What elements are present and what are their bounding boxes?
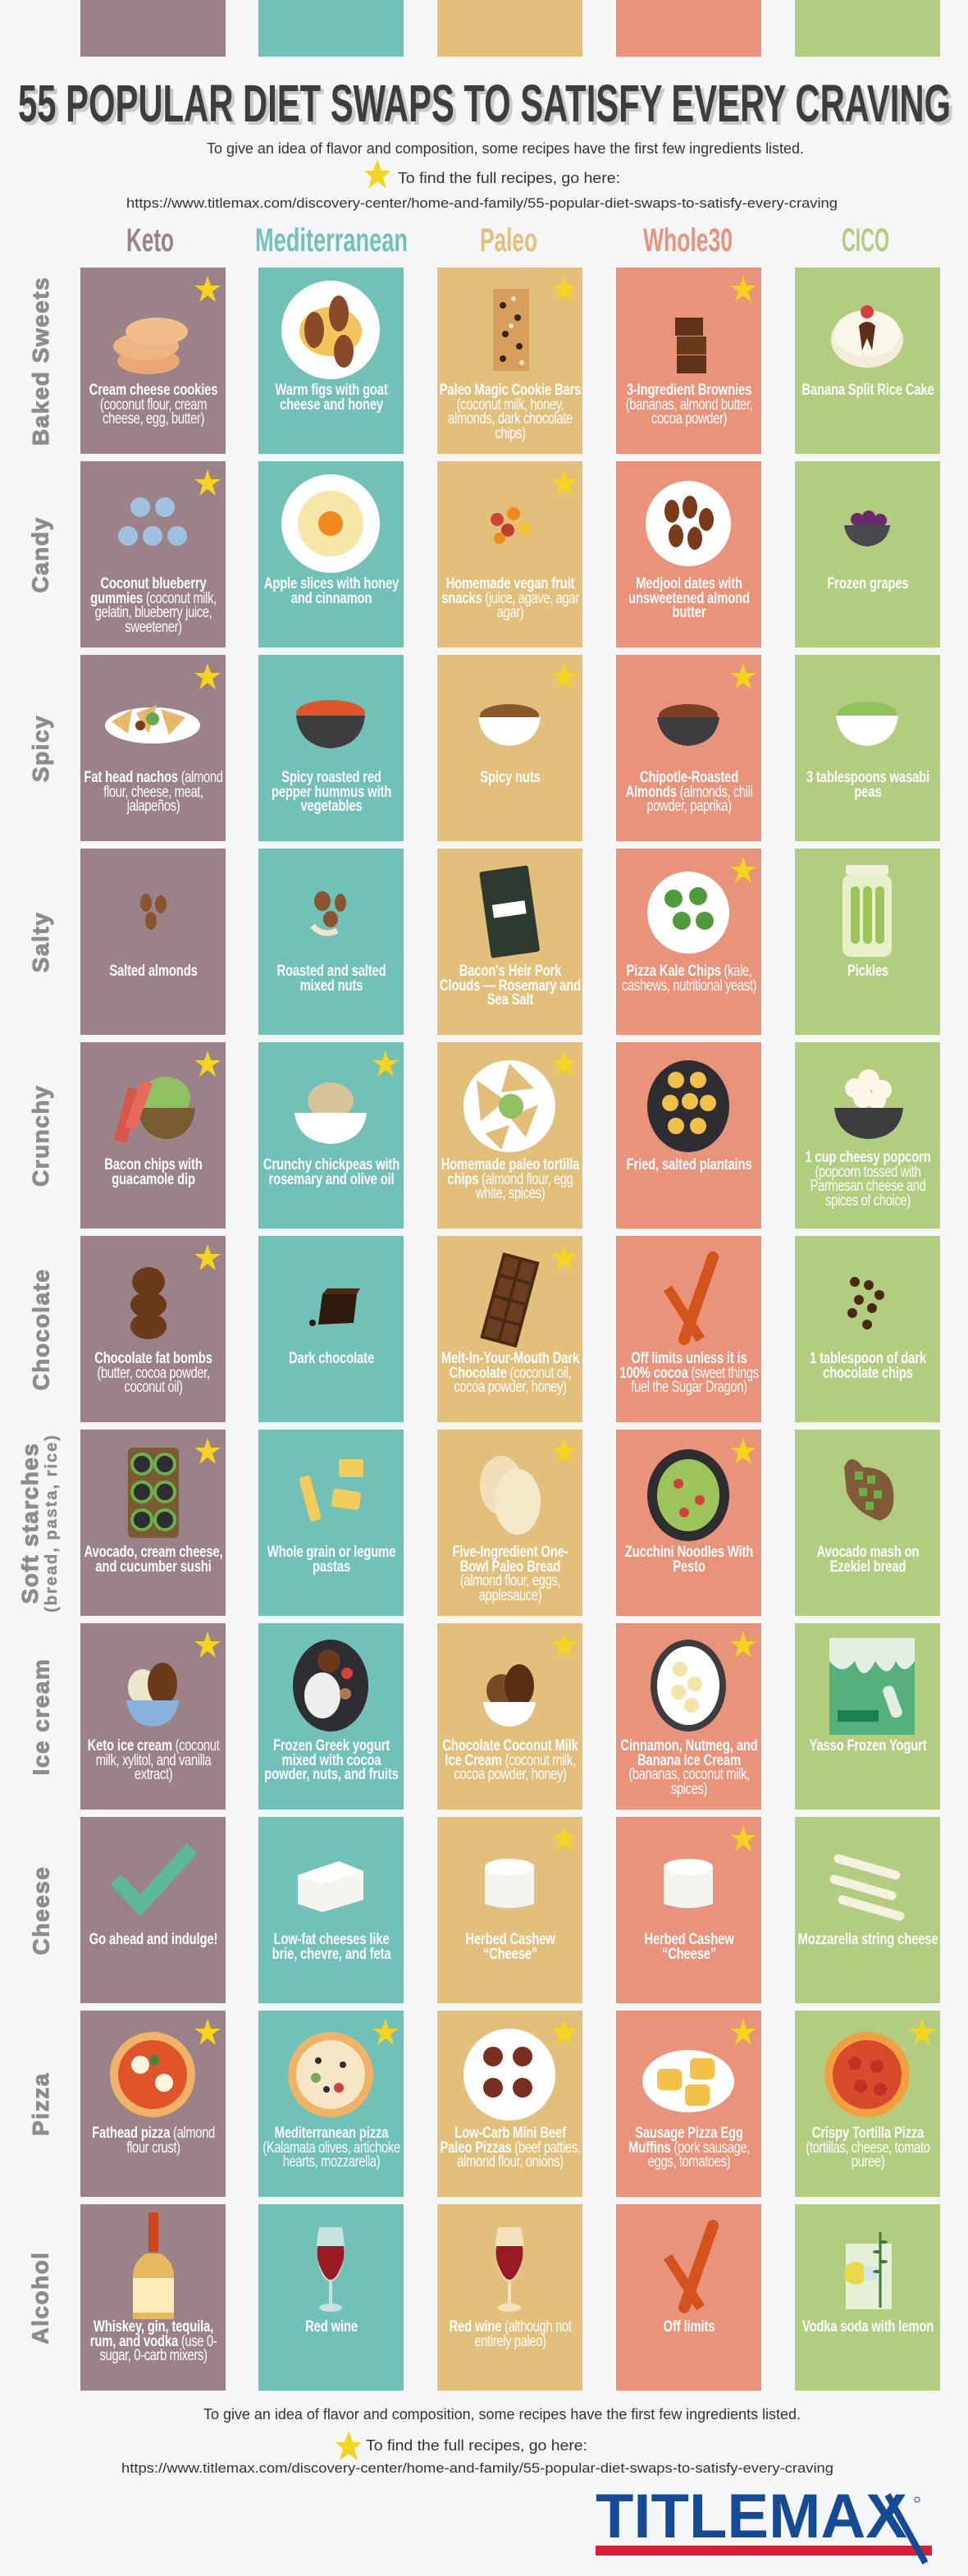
row label: Alcohol: Alcohol <box>28 2251 53 2344</box>
card: cico string cheese <box>795 1817 940 2003</box>
card: keto gummies <box>80 461 226 647</box>
card: paleo fruit snacks: Homemade vegan fruit snacks (juice, agave, agar agar) <box>441 575 578 621</box>
card: whole30 banana ice cream <box>616 1623 761 1810</box>
card: paleo coconut ice cream <box>437 1623 582 1810</box>
card: cico yasso: Yasso Frozen Yogurt <box>809 1737 926 1755</box>
card: paleo cashew cheese <box>437 1817 582 2003</box>
column headers: Whole30 <box>643 222 733 259</box>
card: paleo spicy nuts: Spicy nuts <box>480 769 540 786</box>
card: keto cream cheese cookies <box>80 268 226 454</box>
card: med red wine: Red wine <box>305 2318 357 2336</box>
card: med apple slices: Apple slices with honey and cinnamon <box>263 575 399 607</box>
card: med dark chocolate: Dark chocolate <box>288 1350 374 1367</box>
card: cico rice cake <box>795 268 940 454</box>
top color bars <box>80 0 940 57</box>
card: med mixed nuts <box>258 849 404 1035</box>
card: whole30 X: Off limits unless it is 100% cocoa (sweet things fuel the Sugar Dragon) <box>619 1350 758 1396</box>
card: paleo red wine: Red wine (although not entirely paleo) <box>449 2318 571 2350</box>
card: keto cream cheese cookies: Cream cheese cookies (coconut flour, cream cheese, egg, butter) <box>89 382 217 428</box>
card: cico avocado toast: Avocado mash on Ezekiel bread <box>816 1544 919 1576</box>
card: cico tortilla pizza: Crispy Tortilla Pizza (tortillas, cheese, tomato puree) <box>806 2125 929 2171</box>
card: keto checkmark <box>80 1817 226 2003</box>
card: med mixed nuts: Roasted and salted mixed nuts <box>276 963 386 995</box>
subtitle: To give an idea of flavor and composition, some recipes have the first few ingredients listed. <box>207 140 804 157</box>
card: cico vodka soda: Vodka soda with lemon <box>801 2318 934 2336</box>
card: med frozen yogurt: Frozen Greek yogurt mixed with cocoa powder, nuts, and fruits <box>264 1737 398 1783</box>
card: keto nachos: Fat head nachos (almond flour, cheese, meat, jalapeños) <box>84 769 222 815</box>
row label: Cheese: Cheese <box>28 1865 53 1955</box>
card: keto checkmark: Go ahead and indulge! <box>89 1931 217 1948</box>
card: cico pickles <box>795 849 940 1035</box>
card: med low fat cheese <box>258 1817 404 2003</box>
card: paleo chocolate bar <box>437 1236 582 1422</box>
column headers: CICO <box>842 222 889 259</box>
card: cico tortilla pizza <box>795 2011 940 2197</box>
subtitle <box>126 140 838 211</box>
row label: Salty: Salty <box>28 911 53 972</box>
row label: Ice cream: Ice cream <box>28 1658 53 1775</box>
card: med pastas: Whole grain or legume pastas <box>267 1544 395 1576</box>
card: paleo cashew cheese: Herbed Cashew “Cheese” <box>465 1931 555 1963</box>
column headers: Keto <box>126 222 174 259</box>
card: cico popcorn: 1 cup cheesy popcorn (popcorn tossed with Parmesan cheese and spices of choice) <box>805 1149 930 1210</box>
card: whole30 brownies <box>616 268 761 454</box>
card: med red wine <box>258 2204 404 2391</box>
footer notes: To find the full recipes, go here: <box>366 2437 587 2454</box>
column headers: Mediterranean <box>255 222 408 259</box>
row label: Soft starches <box>17 1434 61 1612</box>
card: whole30 kale chips <box>616 849 761 1035</box>
subtitle: To find the full recipes, go here: <box>398 170 620 186</box>
card: cico vodka soda <box>795 2204 940 2391</box>
card: med hummus: Spicy roasted red pepper hummus with vegetables <box>271 769 391 815</box>
card: keto almonds: Salted almonds <box>109 963 197 980</box>
row label: Spicy: Spicy <box>28 714 53 782</box>
card: med low fat cheese: Low-fat cheeses like brie, chevre, and feta <box>272 1931 390 1963</box>
row label: Baked Sweets: Baked Sweets <box>28 276 53 446</box>
card: whole30 dates <box>616 461 761 647</box>
card: whole30 X <box>616 1236 761 1422</box>
card: cico popcorn <box>795 1042 940 1229</box>
card: keto ice cream <box>80 1623 226 1810</box>
card: whole30 zucchini <box>616 1430 761 1616</box>
card: whole30 plantains <box>616 1042 761 1229</box>
card: keto liquor bottle <box>80 2204 226 2391</box>
card: whole30 zucchini: Zucchini Noodles With Pesto <box>624 1544 753 1576</box>
card: paleo mini pizzas: Low-Carb Mini Beef Paleo Pizzas (beef patties, almond flour, onions) <box>440 2125 580 2171</box>
card: paleo pork clouds <box>437 849 582 1035</box>
card: whole30 almonds <box>616 655 761 841</box>
card: med pizza <box>258 2011 404 2197</box>
card: med chickpeas: Crunchy chickpeas with rosemary and olive oil <box>263 1156 400 1188</box>
card: paleo fruit snacks <box>437 461 582 647</box>
card: whole30 almonds: Chipotle-Roasted Almonds (almonds, chili powder, paprika) <box>625 769 752 815</box>
card: med dark chocolate <box>258 1236 404 1422</box>
card: whole30 egg muffins <box>616 2011 761 2197</box>
card: cico rice cake: Banana Split Rice Cake <box>801 382 934 399</box>
card: med pastas <box>258 1430 404 1616</box>
card: paleo mini pizzas <box>437 2011 582 2197</box>
card: med hummus <box>258 655 404 841</box>
card: whole30 off limits X: Off limits <box>663 2318 715 2336</box>
row label: Crunchy: Crunchy <box>28 1084 53 1187</box>
card: cico yasso <box>795 1623 940 1810</box>
card: whole30 off limits X <box>616 2204 761 2391</box>
card: whole30 cashew cheese <box>616 1817 761 2003</box>
card: med figs: Warm figs with goat cheese and honey <box>275 382 387 414</box>
card: cico grapes <box>795 461 940 647</box>
row label: Pizza: Pizza <box>28 2072 53 2135</box>
column headers: Paleo <box>480 222 537 259</box>
card: cico pickles: Pickles <box>847 963 888 980</box>
card: paleo bread <box>437 1430 582 1616</box>
card: med pizza: Mediterranean pizza (Kalamata olives, artichoke hearts, mozzarella) <box>263 2125 400 2171</box>
card: whole30 brownies: 3-Ingredient Brownies (bananas, almond butter, cocoa powder) <box>625 382 752 428</box>
card: cico wasabi peas <box>795 655 940 841</box>
card: whole30 kale chips: Pizza Kale Chips (kale, cashews, nutritional yeast) <box>621 963 756 995</box>
card: cico avocado toast <box>795 1430 940 1616</box>
card: med apple slices <box>258 461 404 647</box>
card: whole30 egg muffins: Sausage Pizza Egg Muffins (pork sausage, eggs, tomatoes) <box>628 2125 749 2171</box>
card: keto fat bombs: Chocolate fat bombs (butter, cocoa powder, coconut oil) <box>94 1350 212 1396</box>
card: cico wasabi peas: 3 tablespoons wasabi peas <box>806 769 929 801</box>
column headers <box>126 222 889 259</box>
card: cico grapes: Frozen grapes <box>827 575 908 593</box>
footer notes: https://www.titlemax.com/discovery-center/home-and-family/55-popular-diet-swaps-to-satisfy-every-craving <box>121 2460 833 2476</box>
card: keto fathead pizza <box>80 2011 226 2197</box>
card: whole30 dates: Medjool dates with unsweetened almond butter <box>628 575 749 621</box>
card: cico chocolate chips: 1 tablespoon of dark chocolate chips <box>810 1350 925 1382</box>
row label: Candy: Candy <box>28 516 53 593</box>
card: paleo chocolate bar: Melt-In-Your-Mouth Dark Chocolate (coconut oil, cocoa powder, honey) <box>441 1350 579 1396</box>
card: keto nachos <box>80 655 226 841</box>
card: paleo tortilla chips <box>437 1042 582 1229</box>
row label: Chocolate: Chocolate <box>28 1268 53 1390</box>
card: paleo coconut ice cream: Chocolate Coconut Milk Ice Cream (coconut milk, cocoa powder, honey) <box>442 1737 578 1783</box>
card: keto liquor bottle: Whiskey, gin, tequila, rum, and vodka (use 0-sugar, 0-carb mixers) <box>89 2318 217 2364</box>
card: keto ice cream: Keto ice cream (coconut milk, xylitol, and vanilla extract) <box>87 1737 219 1783</box>
card: keto gummies: Coconut blueberry gummies (coconut milk, gelatin, blueberry juice, sweetener) <box>90 575 216 635</box>
card: keto fathead pizza: Fathead pizza (almond flour crust) <box>92 2125 214 2157</box>
footer notes <box>121 2406 833 2476</box>
card: paleo tortilla chips: Homemade paleo tortilla chips (almond flour, egg white, spices) <box>441 1156 579 1202</box>
card: med figs <box>258 268 404 454</box>
card: cico chocolate chips <box>795 1236 940 1422</box>
card: whole30 plantains: Fried, salted plantains <box>626 1156 751 1174</box>
card: cico string cheese: Mozzarella string cheese <box>797 1931 938 1948</box>
card: keto bacon guacamole: Bacon chips with guacamole dip <box>104 1156 202 1188</box>
card: paleo bread: Five-Ingredient One-Bowl Paleo Bread (almond flour, eggs, applesauce) <box>452 1544 568 1604</box>
card: paleo pork clouds: Bacon's Heir Pork Clouds — Rosemary and Sea Salt <box>439 963 581 1009</box>
card: paleo red wine <box>437 2204 582 2391</box>
card: keto fat bombs <box>80 1236 226 1422</box>
card: med chickpeas <box>258 1042 404 1229</box>
row label: Soft starches: Soft starches <box>17 1442 43 1604</box>
card: keto sushi: Avocado, cream cheese, and cucumber sushi <box>84 1544 222 1576</box>
subtitle: https://www.titlemax.com/discovery-center/home-and-family/55-popular-diet-swaps-to-satisfy-every-craving <box>126 195 838 211</box>
card: keto bacon guacamole <box>80 1042 226 1229</box>
card: paleo cookie bars <box>437 268 582 454</box>
footer notes: To give an idea of flavor and composition, some recipes have the first few ingredients listed. <box>203 2406 801 2423</box>
card: med frozen yogurt <box>258 1623 404 1810</box>
card: paleo cookie bars: Paleo Magic Cookie Bars (coconut milk, honey, almonds, dark chocolate chips) <box>439 382 581 442</box>
card: keto almonds <box>80 849 226 1035</box>
card: paleo spicy nuts <box>437 655 582 841</box>
row label: Soft starches: (bread, pasta, rice) <box>43 1434 61 1612</box>
card: whole30 cashew cheese: Herbed Cashew “Cheese” <box>644 1931 733 1963</box>
card: keto sushi <box>80 1430 226 1616</box>
card: whole30 banana ice cream: Cinnamon, Nutmeg, and Banana Ice Cream (bananas, coconut milk, spices) <box>620 1737 757 1797</box>
